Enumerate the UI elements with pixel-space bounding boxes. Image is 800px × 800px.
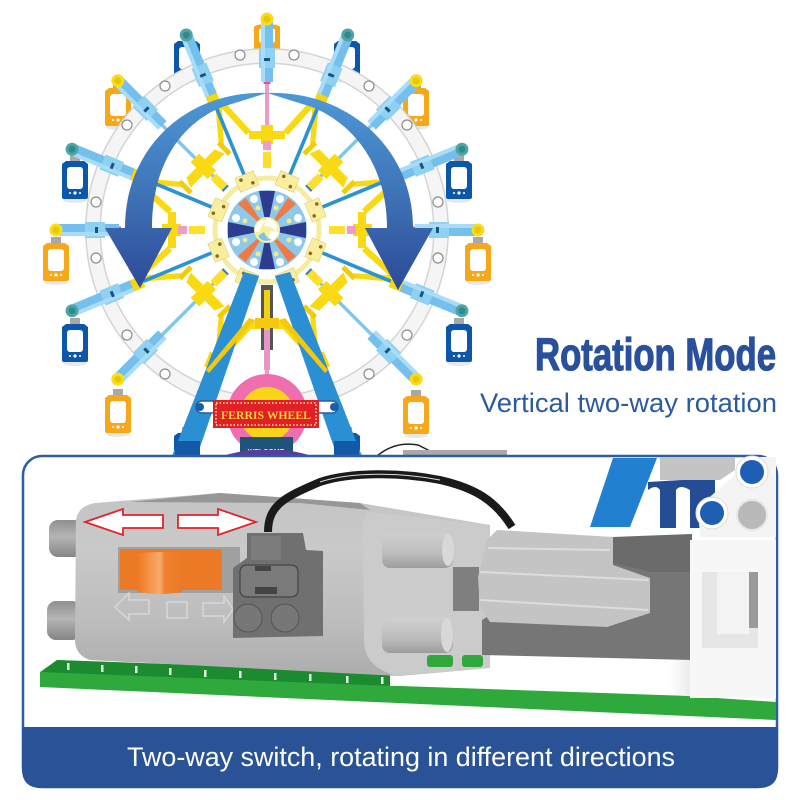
hub ring: [208, 171, 326, 289]
subheading: Vertical two-way rotation: [480, 388, 777, 418]
outer rim: [91, 50, 443, 404]
right arrow: [267, 93, 433, 290]
welcome plaque: WELCOME: [248, 449, 285, 456]
orange switch: [120, 549, 222, 594]
support legs: [172, 272, 362, 456]
panel: motor detail: [22, 456, 778, 788]
navy frame: [648, 478, 715, 528]
white tower: [690, 540, 776, 698]
embossed direction marks: [115, 593, 233, 622]
battery top face: [130, 493, 370, 510]
battery box: [75, 493, 490, 676]
switch slot: [118, 547, 240, 593]
motor edges: [480, 548, 648, 610]
dark connector: [233, 533, 323, 638]
caption band: [22, 727, 778, 788]
motor dark body: [482, 537, 692, 660]
battery box front section: [363, 512, 490, 676]
ferris wheel sign: FERRIS WHEEL: [221, 408, 311, 422]
socket pegs: [382, 533, 479, 653]
left arrow: [105, 93, 267, 288]
red outlined left arrow: [85, 509, 163, 535]
ferris wheel: [43, 12, 491, 475]
white platform: [390, 655, 690, 696]
purple base: [222, 450, 312, 456]
pegs left: [47, 520, 83, 640]
lower yellow brace: [206, 318, 328, 373]
rainbow arch: [227, 374, 307, 454]
black cable: [268, 474, 512, 532]
blue tube: [590, 458, 657, 527]
sign brackets: [196, 401, 338, 413]
green baseplate: [40, 660, 776, 720]
motor light housing: [478, 530, 650, 627]
technic beam: [660, 456, 776, 537]
hub disc: [227, 190, 307, 270]
welcome plaque: [240, 437, 293, 456]
red outlined right arrow: [178, 509, 256, 535]
cable highlight: [320, 474, 440, 482]
ferris wheel sign: [213, 400, 319, 428]
gondola cars: [43, 21, 491, 475]
power cable stub behind panel: [377, 444, 507, 456]
rotation arrows: [105, 93, 433, 290]
motor top dark plate: [613, 534, 692, 572]
green studs: [427, 655, 483, 667]
spokes: [50, 12, 484, 390]
caption text: Two-way switch, rotating in different directions: [127, 742, 675, 772]
